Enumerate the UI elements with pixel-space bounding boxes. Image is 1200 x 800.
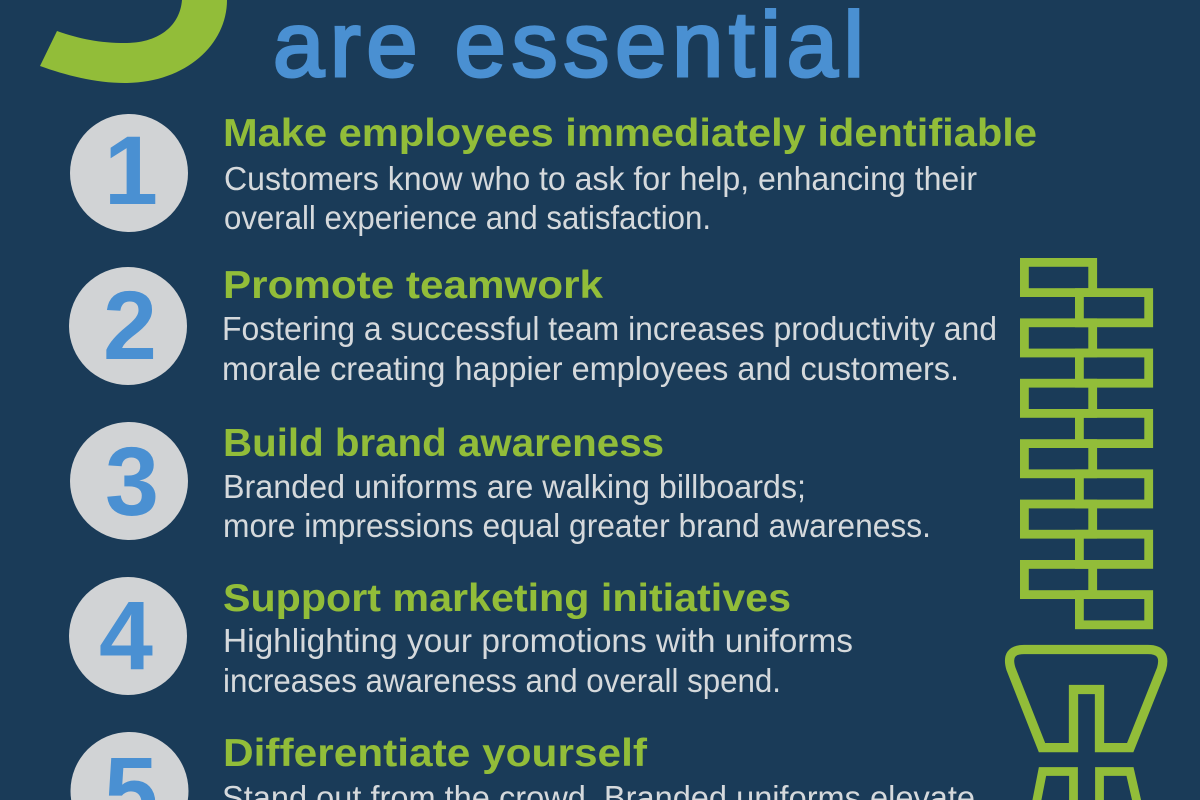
body 2: morale creating happier employees and customers.: [222, 350, 959, 387]
number badge 1: 1: [104, 116, 158, 225]
item 5: [70, 732, 975, 800]
number badge 2: 2: [103, 271, 157, 380]
heading 1: Make employees immediately identifiable: [223, 112, 1037, 155]
number badge 1: [70, 114, 188, 232]
heading 3: Build brand awareness: [223, 422, 664, 465]
body 1: overall experience and satisfaction.: [224, 199, 711, 236]
body 4: increases awareness and overall spend.: [223, 662, 781, 699]
heading 4: Support marketing initiatives: [223, 577, 791, 620]
zipper slider: [1010, 650, 1163, 748]
zipper teeth: [1024, 262, 1149, 625]
zipper pull: [1034, 772, 1140, 800]
item 1: [70, 112, 1037, 236]
body 2: Fostering a successful team increases productivity and: [222, 310, 997, 347]
number badge 4: [69, 577, 187, 695]
big numeral 5 fragment: [40, 0, 227, 83]
body 4: Highlighting your promotions with uniforms: [223, 622, 853, 659]
body 2: [222, 310, 997, 387]
body 3: Branded uniforms are walking billboards;: [223, 468, 806, 505]
item 3: [70, 422, 931, 544]
number badge 2: [69, 267, 187, 385]
item 2: [69, 264, 997, 387]
number badge 3: [70, 422, 188, 540]
body 1: Customers know who to ask for help, enhancing their: [224, 160, 977, 197]
heading 5: Differentiate yourself: [223, 732, 648, 775]
number badge 3: 3: [105, 427, 159, 536]
number badge 5: [70, 732, 188, 800]
item 4: [69, 577, 853, 699]
body 3: [223, 468, 931, 544]
body 3: more impressions equal greater brand awareness.: [223, 507, 931, 544]
icon: zipper: [1010, 262, 1163, 800]
body 1: [224, 160, 977, 236]
body 4: [223, 622, 853, 699]
number badge 4: 4: [99, 581, 153, 690]
heading 2: Promote teamwork: [223, 264, 603, 307]
